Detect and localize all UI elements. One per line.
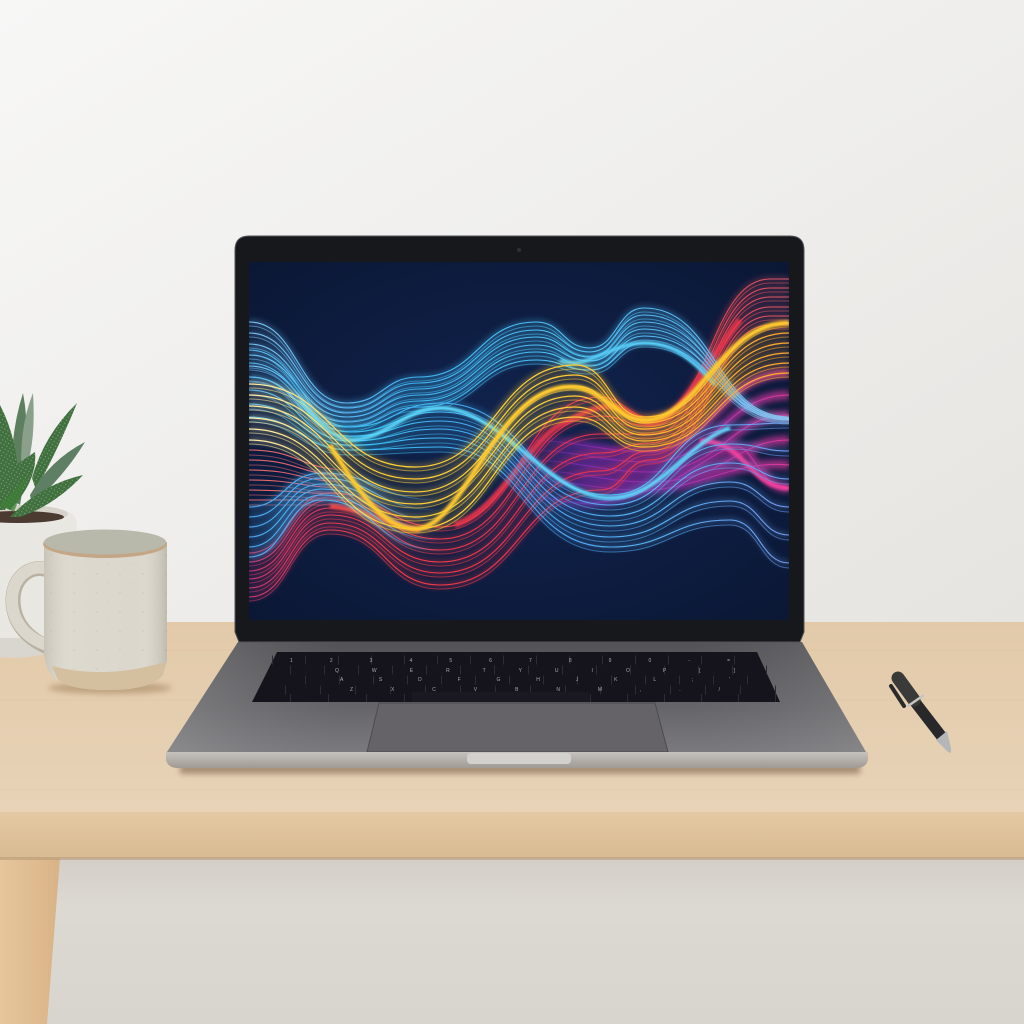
coffee mug [12, 530, 172, 694]
mug shadow [48, 682, 172, 694]
keyboard [252, 652, 780, 702]
aloe leaves [0, 393, 85, 517]
keyboard: Z X C V B N M , . / [350, 687, 721, 693]
webcam [517, 248, 521, 252]
mug rim [43, 530, 167, 558]
laptop lid [235, 236, 804, 642]
keyboard: 1 2 3 4 5 6 7 8 9 0 - = [290, 658, 730, 664]
pen [891, 678, 951, 753]
plant pot with aloe [0, 393, 85, 658]
laptop front edge [166, 752, 868, 768]
trackpad [367, 703, 668, 752]
yellow wave [249, 323, 789, 533]
laptop base deck [166, 642, 867, 758]
laptop shadow [180, 764, 860, 774]
pot [0, 505, 77, 658]
mug body [44, 542, 167, 690]
screen background [249, 262, 789, 620]
pen ring [908, 695, 924, 706]
desk [0, 622, 1024, 860]
wall below desk [0, 855, 1024, 1024]
mug clay base [52, 662, 165, 690]
lower left blue strands [249, 473, 440, 557]
pen cap [898, 678, 914, 700]
keyboard: Q W E R T Y U I O P [ ] [335, 668, 736, 674]
laptop [166, 236, 868, 774]
wall background [0, 0, 1024, 625]
screen wallpaper [249, 262, 789, 620]
pen lower barrel [915, 702, 942, 737]
red wave [249, 279, 789, 601]
pen tip [936, 731, 951, 753]
purple ribbon [520, 373, 789, 503]
table leg [0, 858, 60, 1024]
keyboard: A S D F G H J K L ; ' [340, 677, 730, 683]
pen clip [891, 686, 904, 706]
mug handle [12, 568, 50, 648]
left red strands [249, 450, 350, 505]
opening notch [467, 753, 571, 764]
lower blue wave [249, 350, 789, 568]
upper blue wave [249, 308, 789, 431]
